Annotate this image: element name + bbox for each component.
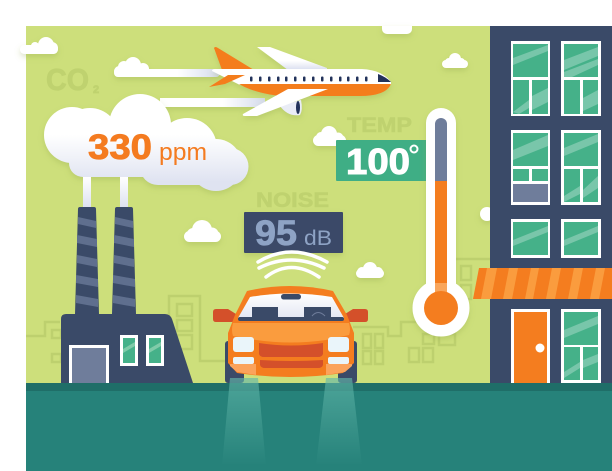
label: CO2: CO <box>46 62 89 97</box>
upper wing <box>257 47 327 70</box>
cockpit <box>378 74 391 82</box>
mirrors <box>213 309 236 322</box>
grille <box>259 343 323 357</box>
car <box>213 286 368 383</box>
factory windows <box>120 335 138 366</box>
factory door <box>70 346 108 386</box>
main cloud with CO2 reading: ppm <box>159 139 207 166</box>
smoke columns <box>83 177 91 207</box>
car body <box>228 286 354 377</box>
fuselage <box>212 69 391 85</box>
95 dB: 95 <box>255 214 297 253</box>
tail fin <box>214 47 254 70</box>
noise panel <box>244 212 343 253</box>
factory <box>61 177 193 386</box>
noise panel: dB <box>304 227 332 250</box>
ground <box>26 383 612 471</box>
330 ppm: 330 <box>88 128 152 167</box>
awning <box>473 268 612 299</box>
dash and seats <box>238 294 344 321</box>
main cloud with CO2 reading <box>44 94 248 191</box>
window reflections <box>513 45 598 378</box>
hood <box>232 323 350 342</box>
headlights <box>233 337 254 352</box>
thermometer <box>412 108 470 336</box>
contrails with cloud puff <box>114 57 265 107</box>
lower panels <box>230 364 352 375</box>
noise label: NOISE <box>256 189 329 212</box>
engine <box>280 100 302 115</box>
headlight beams <box>222 378 362 466</box>
windshield <box>238 294 344 318</box>
factory body <box>61 314 193 383</box>
airplane <box>209 47 391 116</box>
label: CO2: 2 <box>93 84 99 96</box>
sound waves <box>258 252 327 277</box>
temperature panel: 100 <box>346 141 410 182</box>
apartment building <box>473 26 612 386</box>
lower wing <box>243 89 328 116</box>
window row <box>250 76 368 82</box>
wheels <box>225 341 244 383</box>
green sky background <box>26 26 490 383</box>
windows <box>511 41 601 383</box>
background city outlines <box>26 259 490 364</box>
temperature panel <box>336 140 428 182</box>
temp label: TEMP <box>347 114 412 137</box>
chimneys <box>75 207 99 314</box>
small clouds <box>20 26 494 278</box>
stabiliser <box>209 75 245 87</box>
door <box>512 310 548 386</box>
